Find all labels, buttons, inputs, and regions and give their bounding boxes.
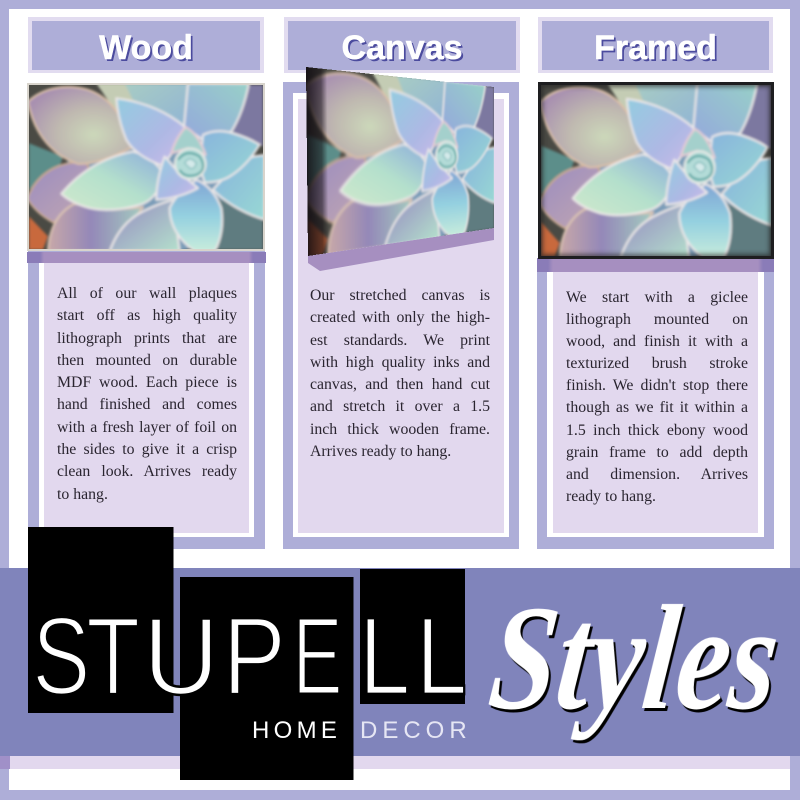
description text: canvas: with high quality inks and bbox=[310, 354, 490, 371]
heading: Framed bbox=[538, 17, 773, 73]
description text: canvas: est standards. We print bbox=[310, 332, 490, 349]
shadow band under framed image bbox=[537, 258, 774, 272]
description text: wood bbox=[57, 285, 237, 503]
heading: Wood bbox=[28, 17, 264, 73]
description text: canvas: inch thick wooden frame. bbox=[310, 421, 490, 438]
logo wordmark: L bbox=[359, 595, 410, 718]
logo wordmark bbox=[32, 594, 467, 719]
footer band bbox=[0, 568, 800, 756]
logo: Stupell Home Decor bbox=[28, 527, 472, 780]
heading: Canvas bbox=[284, 17, 520, 73]
description text: canvas bbox=[310, 287, 490, 460]
footer lilac strip bbox=[10, 756, 790, 769]
logo wordmark: T bbox=[86, 596, 140, 718]
logo wordmark: S bbox=[32, 595, 90, 719]
description text: wood: then mounted on durable bbox=[57, 352, 237, 369]
description panel frame bbox=[28, 249, 265, 549]
description text: framed: ready to hang. bbox=[566, 488, 656, 505]
description text: framed: We start with a giclee bbox=[566, 289, 748, 306]
logo black block right bbox=[360, 569, 465, 704]
description text: wood: All of our wall plaques bbox=[57, 285, 237, 302]
description panel white border bbox=[39, 257, 254, 537]
footer strip left edge bbox=[0, 756, 10, 769]
logo wordmark: L bbox=[416, 595, 467, 718]
logo tagline decor: DECOR bbox=[360, 717, 472, 744]
description text: framed: lithograph mounted on bbox=[566, 311, 748, 328]
heading: Wood: Wood bbox=[99, 29, 193, 67]
description panel white border bbox=[547, 267, 764, 537]
description text: wood: with a fresh layer of foil on bbox=[57, 419, 237, 436]
description panel fill bbox=[44, 257, 249, 533]
description text: framed: though as we fit it within a bbox=[566, 399, 748, 416]
logo wordmark: E bbox=[292, 595, 342, 718]
description text: canvas: created with only the high- bbox=[310, 309, 490, 326]
description text: framed bbox=[566, 289, 748, 505]
description text: wood: lithograph prints that are bbox=[57, 330, 237, 347]
image: framed print bbox=[538, 82, 774, 259]
description text: canvas: and stretch it over a 1.5 bbox=[310, 398, 490, 415]
description text: canvas: canvas, and then hand cut bbox=[310, 376, 490, 393]
description text: framed: wood, and finish it with a bbox=[566, 333, 748, 350]
description text: wood: hand finished and comes bbox=[57, 396, 237, 413]
panel: framed bbox=[537, 17, 774, 549]
heading: Framed: Framed bbox=[594, 29, 717, 67]
panel: canvas bbox=[283, 17, 520, 549]
description text: wood: to hang. bbox=[57, 486, 108, 503]
logo wordmark: U bbox=[143, 594, 219, 718]
description text: canvas: Arrives ready to hang. bbox=[310, 443, 451, 460]
heading: Canvas: Canvas bbox=[342, 29, 462, 67]
image: wood plaque bbox=[27, 83, 265, 251]
description panel fill bbox=[553, 267, 758, 533]
description text: wood: clean look. Arrives ready bbox=[57, 463, 237, 480]
description text: wood: the sides to give it a crisp bbox=[57, 441, 237, 458]
description panel white border bbox=[293, 93, 509, 537]
description text: wood: MDF wood. Each piece is bbox=[57, 374, 237, 391]
logo black block centre bbox=[180, 577, 354, 780]
description text: wood: start off as high quality bbox=[57, 307, 237, 324]
image: stretched canvas bbox=[306, 67, 494, 256]
panel: wood bbox=[27, 17, 266, 549]
image: canvas side edge bbox=[308, 228, 494, 271]
description panel frame bbox=[283, 82, 519, 549]
description panel frame bbox=[537, 259, 774, 549]
description panel fill bbox=[298, 99, 504, 533]
shadow band under wood image bbox=[27, 252, 266, 263]
description text: framed: 1.5 inch thick ebony wood bbox=[566, 422, 748, 439]
description text: framed: grain frame to add depth bbox=[566, 444, 748, 461]
description text: framed: and dimension. Arrives bbox=[566, 466, 748, 483]
logo wordmark: P bbox=[223, 594, 286, 718]
description text: framed: finish. We didn't stop there bbox=[566, 377, 748, 394]
description text: canvas: Our stretched canvas is bbox=[310, 287, 490, 304]
logo black block left bbox=[28, 527, 174, 713]
description text: framed: texturized brush stroke bbox=[566, 355, 748, 372]
logo tagline home: HOME bbox=[252, 717, 341, 744]
